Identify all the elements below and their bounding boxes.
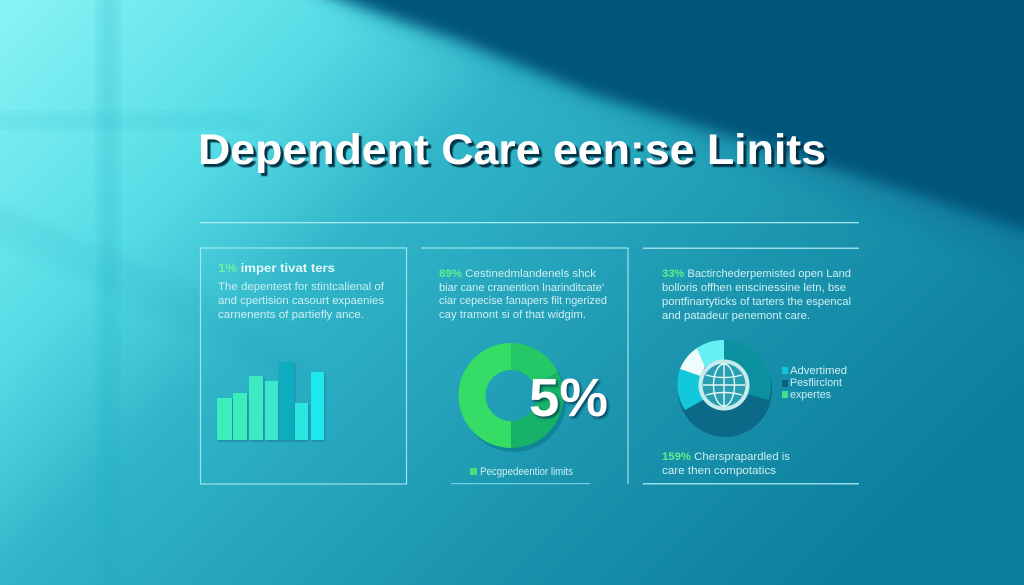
pie legend: Pesflirclont (790, 377, 842, 389)
panel body text: bolloris offhen enscinessine letn, bse (662, 282, 846, 294)
panel body text: 33% Bactirchederpemisted open Land (662, 268, 851, 280)
divider rule (200, 222, 859, 223)
panel body text: biar cane cranention lnarinditcate' (439, 282, 604, 294)
panel body text (662, 268, 851, 322)
panel body text: 89% Cestinedmlandenels shck (439, 268, 597, 280)
panel body text: carnenents of partiefly ance. (218, 309, 364, 321)
panel body text: and patadeur penemont care. (662, 310, 810, 322)
donut value: 5% (529, 368, 608, 428)
callout: care then compotatics (662, 465, 777, 477)
panel body text: and cpertision casourt expaenies (218, 295, 385, 307)
pie legend: expertes (790, 389, 831, 401)
panel body text (439, 268, 607, 321)
globe icon (700, 362, 748, 408)
panel: left (200, 248, 406, 484)
panel body text: cay tramont si of that widgim. (439, 309, 586, 321)
panel body text: The depentest for stintcalienal of (218, 281, 385, 293)
panel: right (643, 248, 859, 484)
pie legend: Advertimed (790, 365, 847, 377)
pie chart with globe (677, 340, 772, 437)
donut chart (458, 343, 566, 452)
panel body text (218, 281, 385, 321)
bar chart (217, 362, 324, 440)
pie legend (782, 365, 847, 401)
panel: middle (421, 248, 628, 484)
panel body text: pontfinartyticks of tarters the espencal (662, 296, 851, 308)
callout: 159% Chersprapardled is (662, 451, 791, 463)
panel body text: ciar cepecise fanapers filt ngerized (439, 295, 607, 307)
donut legend: Pecgpedeentior limits (480, 466, 573, 478)
callout (662, 451, 791, 477)
title: Dependent Care een:se Linits (198, 127, 826, 174)
panel heading: 1% imper tivat ters (218, 261, 335, 275)
